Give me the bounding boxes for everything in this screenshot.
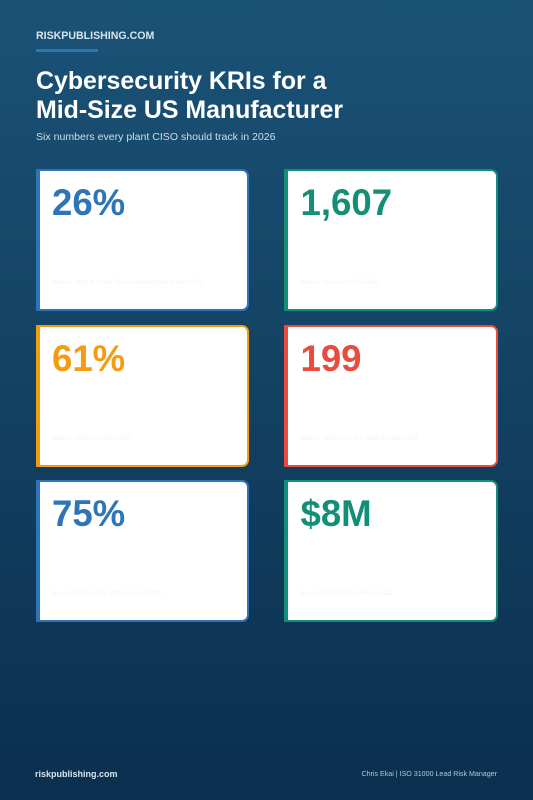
title: Cybersecurity KRIs for a [36, 67, 326, 95]
brand underline [36, 49, 98, 52]
panel: KRI 1,607 [284, 169, 498, 311]
source: Source: CISA ICS Advisory data [300, 590, 393, 597]
footer website: riskpublishing.com [35, 769, 118, 779]
panel: KRI $8M [284, 480, 498, 622]
source: Source: IBM X-Force Threat Intelligence Index 2025 [52, 279, 202, 286]
brand label: RISKPUBLISHING.COM [36, 30, 154, 42]
value: 61% [52, 338, 125, 378]
panel: KRI 75% [36, 480, 249, 622]
footer author: Chris Ekai | ISO 31000 Lead Risk Manager [361, 770, 497, 778]
value: 75% [52, 493, 125, 534]
title [36, 67, 343, 124]
panel: KRI 61% [36, 324, 249, 466]
value: 199 [300, 338, 362, 378]
source: Source: Verizon 2025 DBIR [300, 279, 380, 286]
value: $8M [300, 493, 372, 534]
subtitle: Six numbers every plant CISO should track in 2026 [36, 131, 276, 143]
panel: KRI 199 [284, 324, 498, 466]
title: Mid-Size US Manufacturer [36, 96, 343, 124]
source: Source: IBM Cost of a Data Breach 2025 [300, 434, 418, 442]
panel: KRI 26% [36, 169, 249, 311]
source: Source: CISA, May 2024 to May 2025 [52, 590, 161, 597]
value: 26% [52, 182, 125, 223]
source: Source: Verizon 2025 DBIR [52, 434, 132, 442]
value: 1,607 [300, 182, 392, 223]
